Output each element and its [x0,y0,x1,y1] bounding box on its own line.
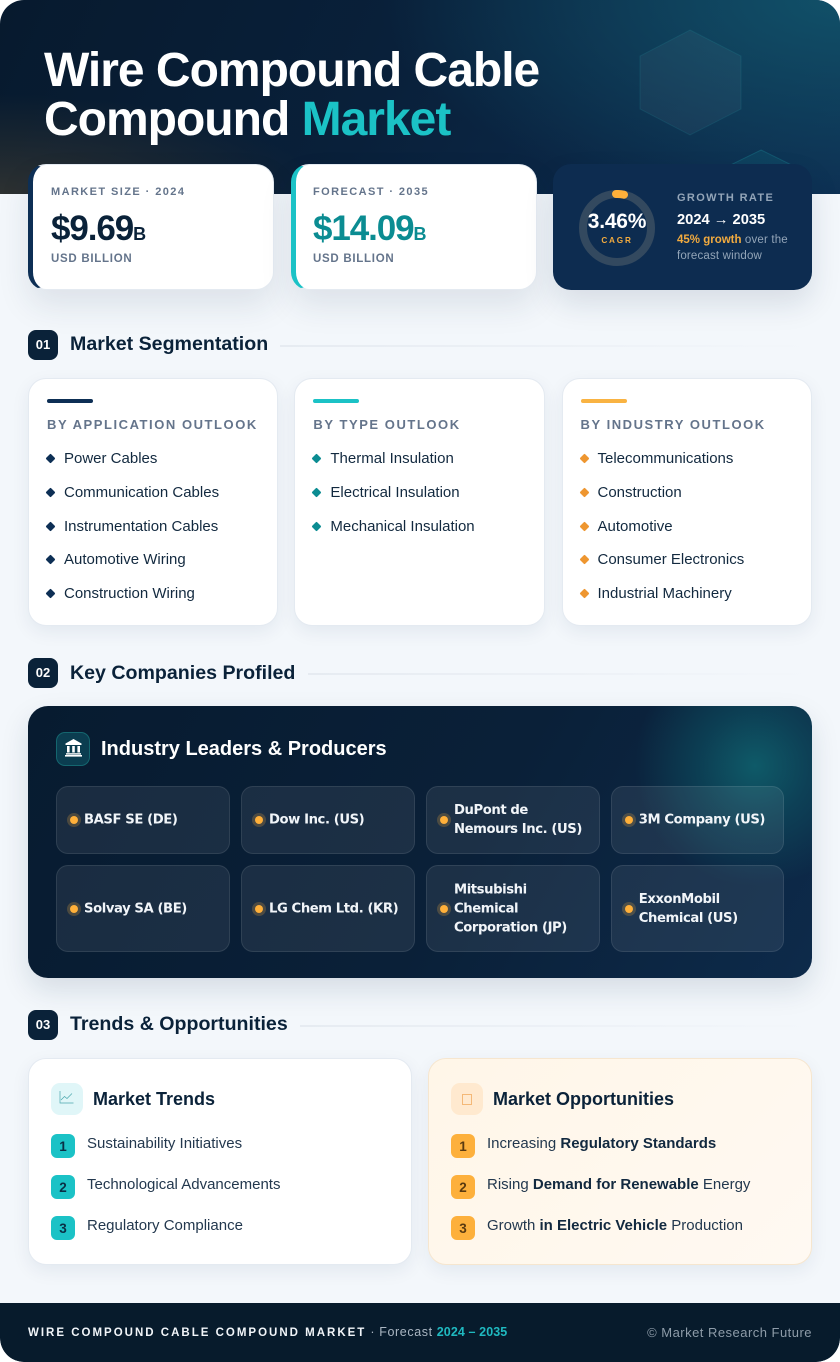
panel: by industry: BY INDUSTRY OUTLOOK [580,417,766,432]
section 01 heading [28,330,478,360]
panel: companies: Chemical [454,901,518,916]
company chips: BASF SE (DE) [84,812,177,828]
stat card: forecast [291,164,537,290]
section 01 heading: Market Segmentation [70,333,268,355]
title [44,44,539,146]
panel: by application: BY APPLICATION OUTLOOK [47,417,258,432]
footer credit: © Market Research Future [647,1325,812,1340]
panel: companies: Solvay SA (BE) [84,901,187,916]
panel: by industry: Industrial Machinery [598,585,732,602]
panel: companies: Dow Inc. (US) [269,812,364,828]
growth text: GROWTH RATE [677,192,774,204]
panel: market opportunities: 2 [459,1180,467,1195]
panel: by industry: Construction [598,484,682,501]
growth rate card: 3.46% [588,210,646,232]
panel: companies: DuPont de [454,803,528,818]
panel: companies: Nemours Inc. (US) [454,822,582,837]
panel: by application: Instrumentation Cables [64,518,218,535]
panel: by application: Automotive Wiring [64,551,186,568]
panel: by industry: Consumer Electronics [598,551,744,568]
panel: by type: BY TYPE OUTLOOK [313,417,461,432]
panel: market trends: Sustainability Initiatives [87,1135,242,1152]
stat card: forecast: $14.09B [313,209,426,248]
panel: market opportunities: 1 [459,1139,467,1154]
growth rate card: 45% growth over the [677,234,788,246]
icon: chart [51,1083,83,1115]
section 01 heading: 01 [36,337,50,352]
panel: by application: Communication Cables [64,484,219,501]
panel: market opportunities [428,1058,812,1265]
title: Compound Market [44,93,450,146]
panel: companies: 3M Company (US) [639,812,765,828]
panel: market trends: Market Trends [93,1089,215,1109]
section 02 heading: 02 [36,665,50,680]
stat card: market size [28,164,274,290]
panel: companies: Mitsubishi [454,882,527,897]
footer [0,1303,840,1362]
section 02 heading: Key Companies Profiled [70,662,295,684]
panel: companies [28,706,812,978]
panel: by type: Thermal Insulation [330,450,454,467]
panel: by industry [562,378,812,626]
growth rate card: 2024 → 2035 [677,212,765,228]
panel: market trends: Regulatory Compliance [87,1217,243,1234]
section 02 heading [28,658,496,688]
CAGR donut [579,190,655,266]
panel: market trends: Technological Advancements [87,1176,280,1193]
panel: by industry: Automotive [598,518,673,535]
panel: by application: Construction Wiring [64,585,195,602]
company chips [56,786,230,854]
panel: market opportunities: Growth in Electric Vehicle Production [487,1217,743,1234]
panel: market trends: 2 [59,1180,67,1195]
stat card: forecast: FORECAST · 2035 [313,186,429,198]
panel: market opportunities: Increasing Regulatory Standards [487,1135,716,1152]
panel: market opportunities: Rising Demand for Renewable Energy [487,1176,750,1193]
growth rate card: CAGR [601,236,633,245]
panel: companies: LG Chem Ltd. (KR) [269,901,398,916]
panel: companies: Corporation (JP) [454,920,567,935]
stat card: market size: USD BILLION [51,253,132,265]
header banner [0,0,840,194]
section 03 heading: 03 [36,1017,50,1032]
panel: market trends: 1 [59,1139,67,1154]
icon: missing glyph box [451,1083,483,1115]
panel: companies: Chemical (US) [639,910,738,926]
panel: by application: Power Cables [64,450,157,467]
panel: market opportunities: 3 [459,1221,467,1236]
panel: companies: ExxonMobil [639,892,720,906]
panel: by type: Electrical Insulation [330,484,460,501]
footer title: WIRE COMPOUND CABLE COMPOUND MARKET · Forecast 2024 – 2035 [28,1325,507,1339]
stat card: market size: MARKET SIZE · 2024 [51,186,185,198]
panel: market opportunities: Market Opportunities [493,1089,674,1109]
section 03 heading: Trends & Opportunities [70,1013,288,1035]
stat card: forecast: USD BILLION [313,253,394,265]
stat card: market size: $9.69B [51,209,146,248]
section 03 heading [28,1010,490,1040]
panel: by type [294,378,545,626]
icon: bank [56,732,90,766]
panel: by industry: Telecommunications [598,450,733,467]
title: Wire Compound Cable [44,44,539,97]
panel: by application [28,378,278,626]
growth rate card [553,164,812,290]
panel: market trends: 3 [59,1221,67,1236]
panel: market trends [28,1058,412,1265]
hexagon decorations [640,30,790,164]
panel: by type: Mechanical Insulation [330,518,475,535]
growth rate card: forecast window [677,250,762,262]
panel heading: Industry Leaders & Producers [101,738,387,760]
